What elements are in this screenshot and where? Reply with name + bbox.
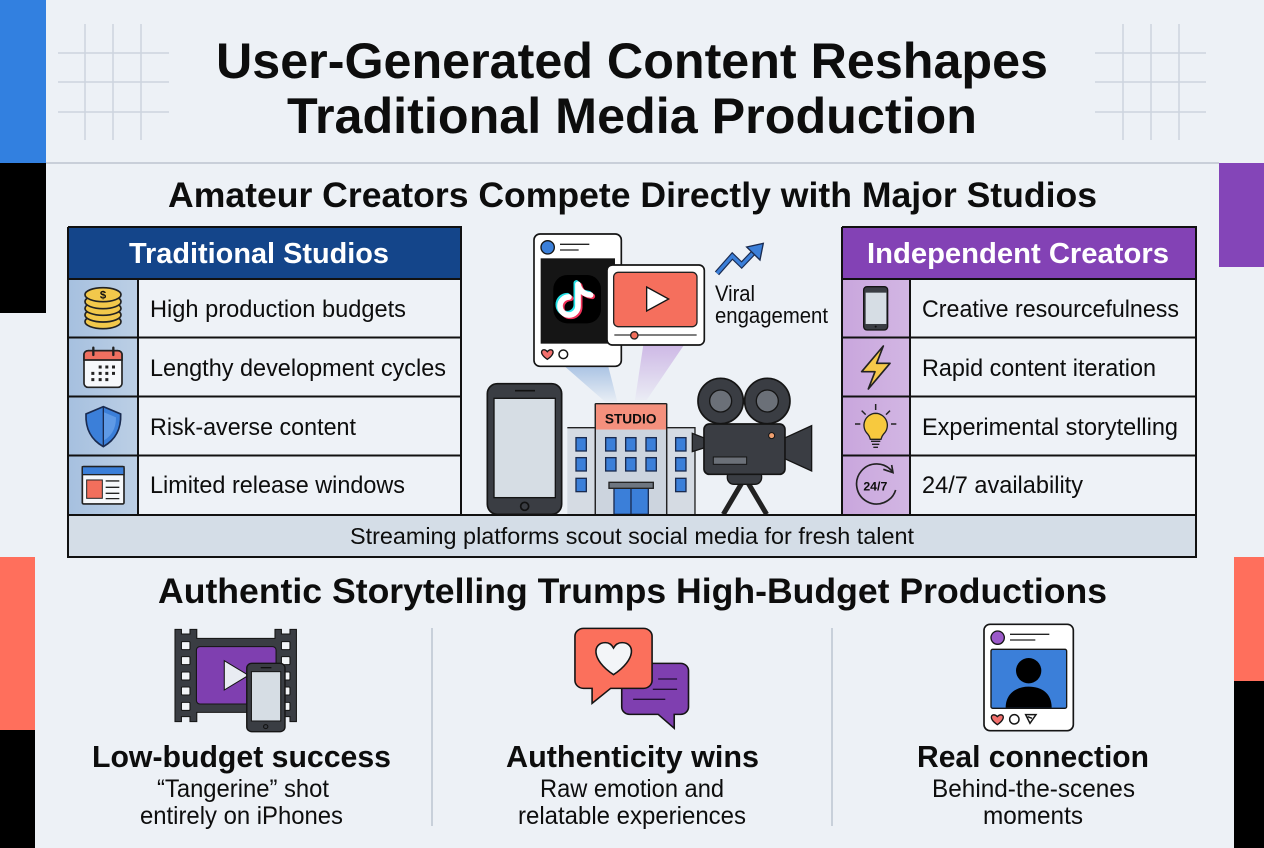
right top colour band	[1219, 163, 1264, 267]
beam: blue	[565, 367, 617, 402]
row: risk-averse content: Risk-averse content	[150, 414, 356, 441]
row: experimental storytelling: Experimental storytelling	[922, 414, 1178, 441]
title: Traditional Media Production	[287, 88, 977, 144]
text: authenticity wins: Authenticity wins	[506, 739, 759, 774]
text: real connection: Real connection	[917, 739, 1149, 774]
icon: profile post	[984, 624, 1073, 731]
beam: purple	[635, 345, 684, 400]
row: creative resourcefulness: Creative resourcefulness	[922, 296, 1179, 323]
left bottom colour band	[0, 557, 35, 848]
panel: traditional studios	[68, 227, 461, 515]
icon: calendar	[84, 348, 122, 387]
title	[216, 33, 1048, 144]
text: authenticity wins: relatable experiences	[518, 802, 746, 830]
row: 24/7 availability: 24/7 availability	[922, 472, 1083, 499]
icon: chat bubbles	[575, 628, 689, 728]
text: authenticity wins	[506, 739, 759, 830]
text: real connection	[917, 739, 1149, 830]
row: limited release windows: Limited release windows	[150, 472, 405, 499]
social post card	[534, 234, 621, 366]
label: viral engagement	[715, 281, 828, 328]
banner: streaming platforms: Streaming platforms scout social media for fresh talent	[350, 523, 915, 549]
icon: light bulb	[855, 404, 896, 447]
icon: viral arrow	[717, 243, 763, 273]
row: rapid content iteration: Rapid content iteration	[922, 355, 1156, 382]
row: high production budgets: High production budgets	[150, 296, 406, 323]
smartphone	[487, 384, 562, 514]
heading: independent creators: Independent Creators	[867, 238, 1169, 270]
film camera	[692, 378, 812, 514]
icon: coins	[85, 288, 121, 329]
icon: phone	[864, 287, 888, 330]
studio building: STUDIO	[605, 411, 657, 426]
icon: lightning bolt	[862, 346, 890, 389]
text: low-budget success: Low-budget success	[92, 739, 391, 774]
text: real connection: moments	[983, 802, 1083, 830]
heading: amateur creators: Amateur Creators Compete Directly with Major Studios	[168, 176, 1097, 215]
icon: film strip and phone	[175, 629, 296, 732]
title: User-Generated Content Reshapes	[216, 33, 1048, 89]
left top colour band	[0, 0, 46, 313]
studio building	[567, 404, 695, 514]
column: low-budget success	[92, 629, 391, 830]
icon: coins: $	[100, 290, 107, 302]
video player card	[607, 265, 704, 345]
heading: traditional studios: Traditional Studios	[129, 238, 389, 270]
column: real connection	[917, 624, 1149, 830]
icon: 24/7 clock: 24/7	[863, 480, 887, 494]
text: low-budget success: entirely on iPhones	[140, 802, 343, 830]
panel: independent creators	[842, 227, 1196, 515]
illustration: platforms and studio	[487, 234, 812, 514]
icon: 24/7 clock	[857, 464, 896, 504]
text: low-budget success: “Tangerine” shot	[157, 775, 329, 803]
text: low-budget success	[92, 739, 391, 830]
text: authenticity wins: Raw emotion and	[540, 775, 724, 803]
label: viral engagement: Viral	[715, 281, 755, 306]
banner: streaming platforms	[68, 515, 1196, 557]
heading: authentic storytelling: Authentic Storytelling Trumps High-Budget Productions	[158, 572, 1107, 611]
text: real connection: Behind-the-scenes	[932, 775, 1135, 803]
icon: browser window	[82, 467, 124, 504]
label: viral engagement: engagement	[715, 303, 828, 328]
column: authenticity wins	[506, 628, 759, 830]
right bottom colour band	[1234, 557, 1264, 848]
row: lengthy development cycles: Lengthy development cycles	[150, 355, 446, 382]
icon: shield	[86, 407, 121, 447]
